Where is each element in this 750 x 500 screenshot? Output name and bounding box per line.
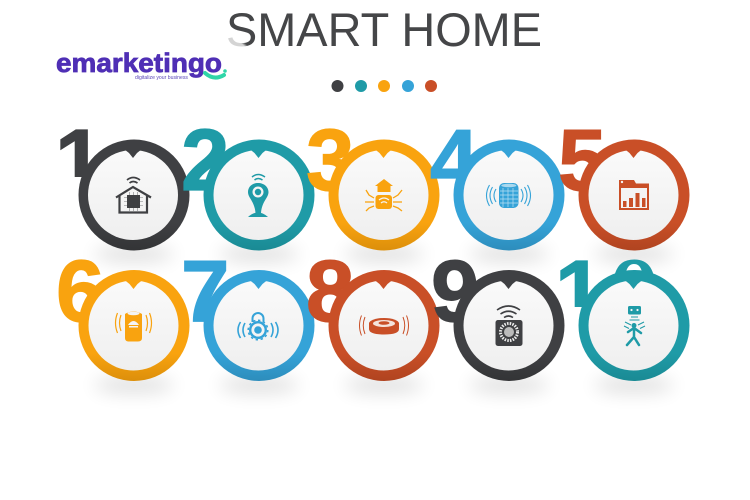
item 10 — [560, 260, 690, 381]
item 1: 1 — [55, 112, 103, 209]
icon: smart house with chip — [116, 178, 151, 212]
icon: robot vacuum — [360, 316, 408, 336]
item 4: 4 — [430, 112, 478, 209]
item 4 — [430, 112, 564, 250]
item 6 — [56, 243, 190, 381]
item 9 — [431, 243, 564, 381]
item 7 — [181, 243, 314, 381]
shadows under the rings — [94, 246, 674, 393]
item 2: 2 — [181, 112, 229, 209]
icon: robot sensing a person — [624, 306, 645, 345]
icon: smart hub — [365, 179, 402, 211]
logo: emarketingo: emarketingo — [56, 48, 222, 78]
icon: wifi camera — [248, 174, 268, 217]
item 8 — [306, 243, 440, 381]
item 8: 8 — [306, 243, 354, 340]
item 1 — [60, 129, 190, 250]
logo: emarketingo: digitalize your business — [135, 75, 188, 81]
item 2 — [181, 112, 314, 250]
item 10: 1 — [555, 243, 603, 340]
icon: gear lock — [238, 313, 278, 340]
item 9: 9 — [431, 243, 479, 340]
icon: smart thermostat — [496, 306, 522, 346]
pagination dots — [332, 80, 437, 92]
icon: smart speaker — [486, 183, 530, 208]
item 6: 6 — [56, 243, 104, 340]
icon: dashboard window — [619, 180, 649, 210]
item 3 — [306, 112, 440, 250]
item 5 — [558, 112, 690, 250]
item 10: 0 — [610, 243, 658, 340]
item 5: 5 — [558, 112, 606, 209]
item 7: 7 — [181, 243, 229, 340]
title: SMART HOME — [226, 4, 542, 57]
icon: smart cylinder speaker — [116, 312, 152, 342]
item 3: 3 — [306, 112, 354, 209]
